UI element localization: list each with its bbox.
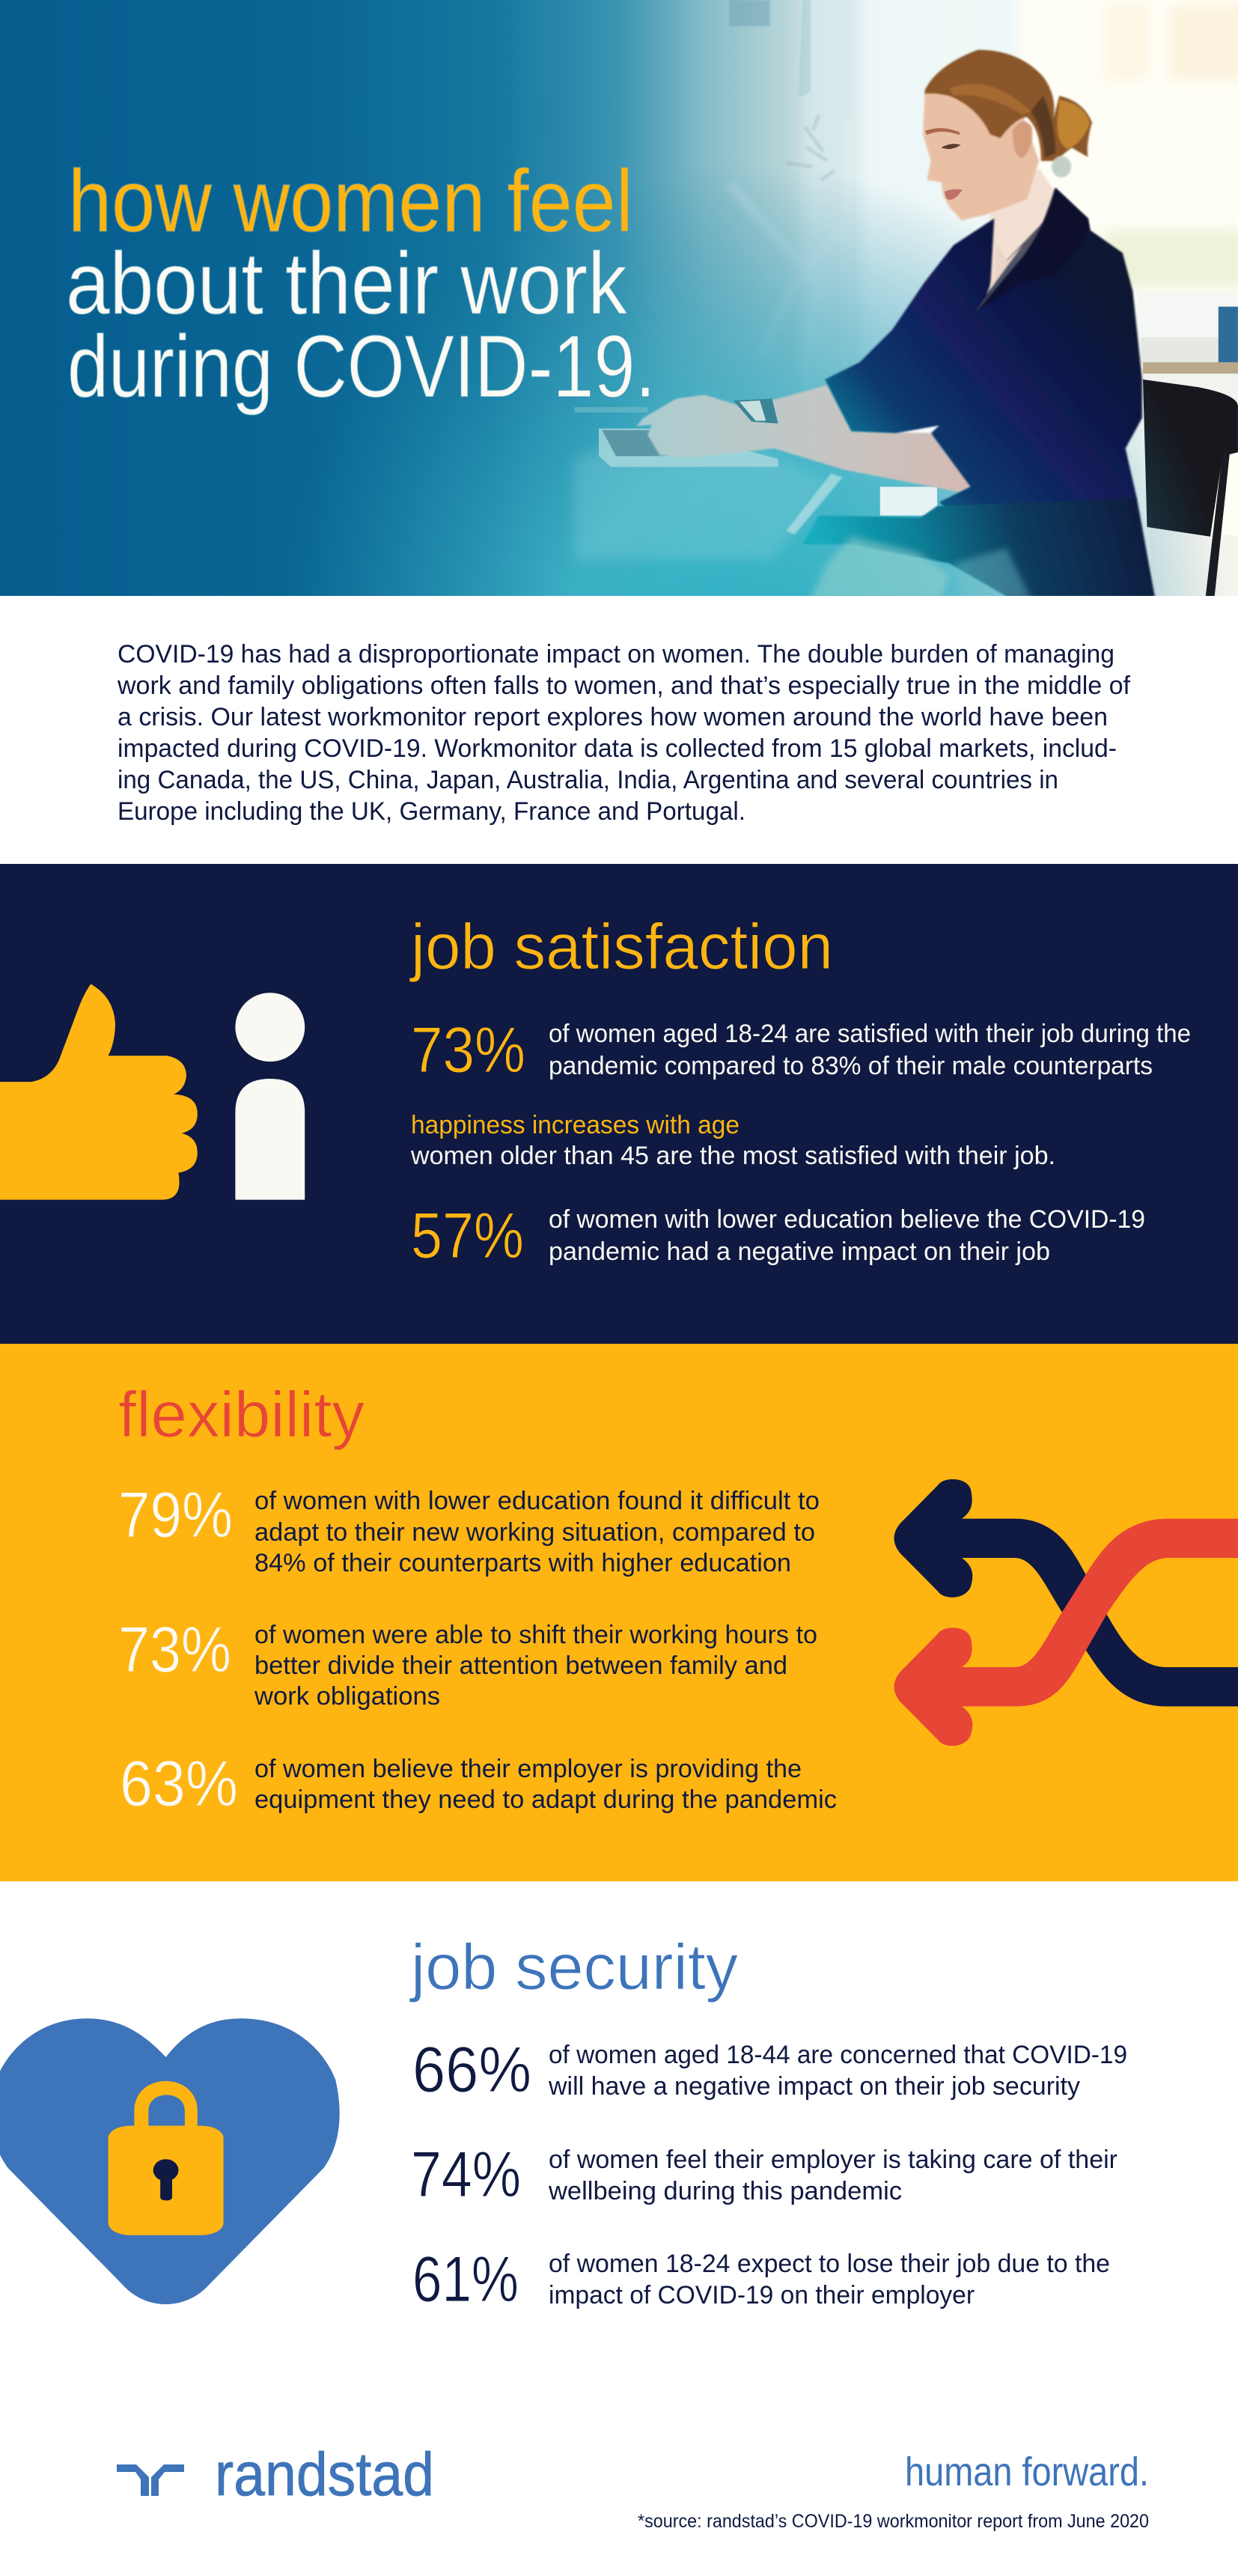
note: happiness increases with age xyxy=(410,1111,1055,1170)
hair xyxy=(925,50,1092,161)
stat: 63%: of women believe their employer is providing the xyxy=(254,1755,802,1783)
hero teal colour wash xyxy=(334,180,1210,596)
intro paragraph: COVID-19 has had a disproportionate impact on women. The double burden of managing xyxy=(118,640,1114,669)
stat: 66% xyxy=(412,2034,1127,2106)
hero background gradient xyxy=(0,0,1238,596)
note: happiness increases with age: women older than 45 are the most satisfied with their job. xyxy=(410,1142,1055,1170)
icon: crossing arrows xyxy=(894,1479,1238,1746)
stat: 79%: of women with lower education found it difficult to xyxy=(254,1487,820,1515)
icon: heart with padlock xyxy=(0,2018,340,2304)
stat: 74%: wellbeing during this pandemic xyxy=(548,2177,902,2205)
stat: 73%: 73% xyxy=(411,1014,525,1086)
desk highlight xyxy=(570,448,823,563)
skirt and plant fading into teal xyxy=(802,499,1155,599)
stat: 61% xyxy=(412,2244,1110,2315)
stat: 63%: 63% xyxy=(120,1748,238,1820)
hero title xyxy=(66,152,656,416)
stat: 73%: 73% xyxy=(118,1614,231,1686)
stat: 61%: 61% xyxy=(412,2244,519,2315)
intro paragraph: Europe including the UK, Germany, France and Portugal. xyxy=(118,797,745,826)
stat: 79%: 79% xyxy=(118,1479,233,1551)
intro paragraph: impacted during COVID-19. Workmonitor data is collected from 15 global markets, includ- xyxy=(118,734,1117,763)
panel: job security xyxy=(0,1931,1127,2315)
panel: hero banner xyxy=(0,0,1238,599)
stat: 73%: of women aged 18-24 are satisfied with their job during the xyxy=(549,1020,1191,1048)
panel: job satisfaction xyxy=(0,864,1238,1344)
stat: 79%: adapt to their new working situation, compared to xyxy=(254,1518,815,1547)
hero title: during COVID-19. xyxy=(67,317,656,416)
stat: 63%: equipment they need to adapt during the pandemic xyxy=(254,1785,837,1814)
stat: 73%: work obligations xyxy=(254,1682,440,1711)
intro paragraph: ing Canada, the US, China, Japan, Australia, India, Argentina and several countries in xyxy=(118,766,1058,794)
stat: 57%: 57% xyxy=(411,1200,524,1272)
hero title: about their work xyxy=(66,234,628,333)
heading: flexibility: flexibility xyxy=(118,1379,365,1451)
intro paragraph xyxy=(117,640,1131,826)
neck and face xyxy=(990,168,1054,284)
hero title: how women feel xyxy=(68,152,633,251)
intro paragraph: a crisis. Our latest workmonitor report explores how women around the world have been xyxy=(118,703,1108,731)
note: happiness increases with age: happiness increases with age xyxy=(411,1111,740,1139)
stat: 79% xyxy=(118,1479,820,1577)
stat: 74% xyxy=(411,2139,1117,2211)
job satisfaction background xyxy=(0,864,1238,1344)
logo: randstad: randstad xyxy=(215,2440,434,2509)
stat: 66%: of women aged 18-44 are concerned that COVID-19 xyxy=(549,2041,1127,2069)
heading: job security: job security xyxy=(409,1931,738,2003)
source note: *source: randstad’s COVID-19 workmonitor report from June 2020 xyxy=(638,2511,1149,2532)
stat: 57%: pandemic had a negative impact on their job xyxy=(549,1237,1050,1266)
stat: 73%: of women were able to shift their working hours to xyxy=(254,1621,817,1649)
stat: 74%: of women feel their employer is taking care of their xyxy=(549,2146,1117,2174)
footer xyxy=(117,2440,1149,2532)
stat: 66%: will have a negative impact on their job security xyxy=(548,2072,1080,2101)
tagline: human forward: human forward. xyxy=(905,2449,1149,2494)
flexibility background xyxy=(0,1344,1238,1881)
stat: 57%: of women with lower education believe the COVID-19 xyxy=(549,1205,1145,1234)
stat: 73%: pandemic compared to 83% of their male counterparts xyxy=(549,1052,1153,1080)
stat: 73%: better divide their attention between family and xyxy=(254,1651,787,1680)
panel: flexibility xyxy=(0,1344,1238,1881)
stat: 57% xyxy=(411,1200,1145,1272)
stat: 61%: impact of COVID-19 on their employer xyxy=(549,2281,975,2309)
stat: 73% xyxy=(118,1614,817,1711)
laptop xyxy=(599,428,778,467)
stat: 74%: 74% xyxy=(411,2139,521,2211)
icon: thumbs up with person xyxy=(0,984,305,1200)
hero photo: woman working at a laptop xyxy=(574,50,1155,599)
intro paragraph: work and family obligations often falls to women, and that’s especially true in the middle of xyxy=(117,672,1131,700)
stat: 73% xyxy=(411,1014,1191,1086)
stat: 66%: 66% xyxy=(412,2034,531,2106)
stat: 61%: of women 18-24 expect to lose their job due to the xyxy=(549,2250,1110,2278)
stat: 63% xyxy=(120,1748,837,1820)
hero photo: room backdrop with curtain and window xyxy=(729,0,1238,599)
shirt xyxy=(825,188,1142,517)
arms and hands xyxy=(636,386,972,493)
heading: job satisfaction: job satisfaction xyxy=(409,911,833,983)
logo: randstad xyxy=(117,2440,434,2509)
stat: 79%: 84% of their counterparts with higher education xyxy=(254,1549,791,1577)
